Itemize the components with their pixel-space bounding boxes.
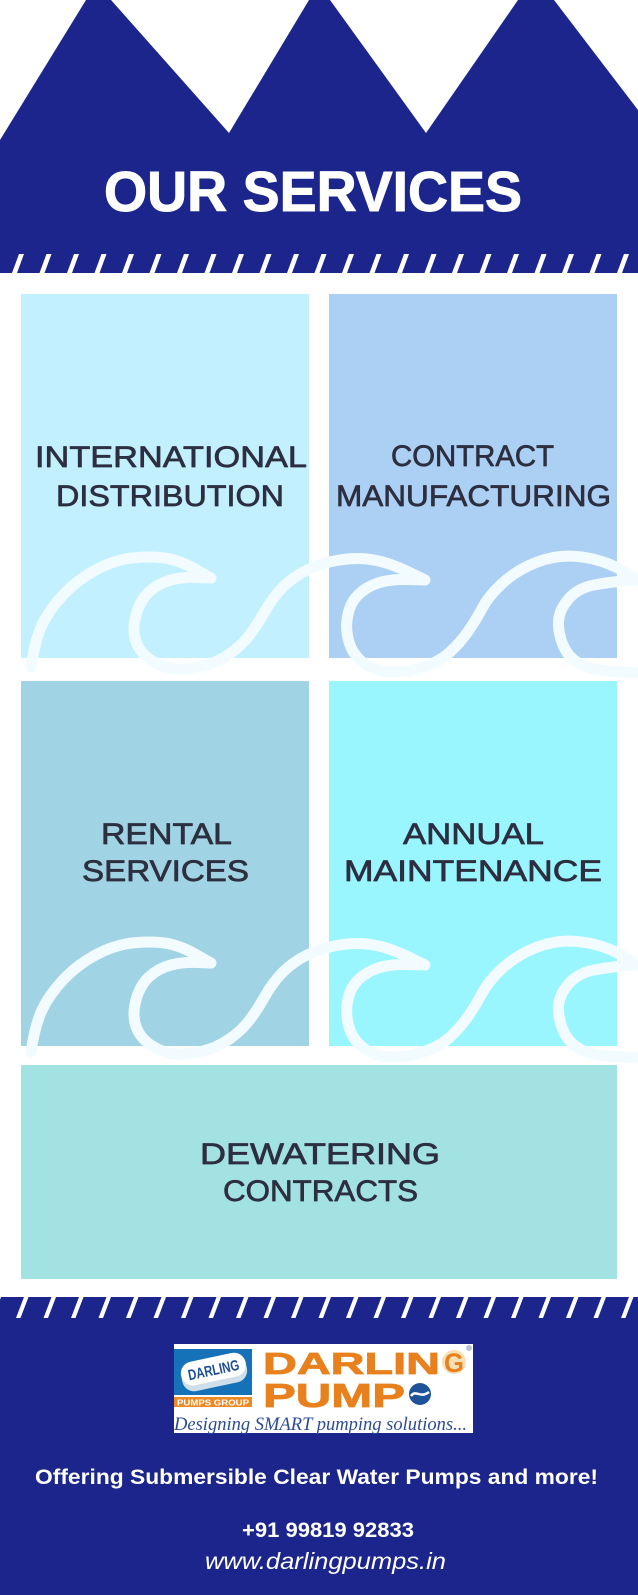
website: www.darlingpumps.in [205, 1548, 446, 1574]
company logo: DARLING [186, 1357, 241, 1384]
company logo: DARLIN [263, 1346, 440, 1381]
label: contract manufacturing [336, 440, 611, 513]
label: dewatering contracts: DEWATERING [200, 1138, 440, 1171]
label: annual maintenance: ANNUAL [403, 818, 544, 851]
panel: annual maintenance [329, 681, 617, 1046]
panel: contract manufacturing [329, 294, 617, 658]
panel: international distribution [21, 294, 309, 658]
label: rental services: RENTAL [101, 818, 232, 851]
header banner [0, 0, 638, 273]
header tick row [12, 254, 629, 273]
company logo: PUMP [263, 1377, 405, 1414]
label: rental services: SERVICES [82, 855, 249, 888]
company logo: PUMPS GROUP [177, 1398, 250, 1408]
panel: dewatering contracts [21, 1065, 617, 1279]
footer tick row [0, 1297, 634, 1318]
label: contract manufacturing: CONTRACT [391, 440, 554, 473]
footer banner [0, 1297, 638, 1595]
tagline: Offering Submersible Clear Water Pumps and more! [35, 1466, 598, 1489]
label: annual maintenance [344, 818, 602, 888]
wave decoration: first row [31, 556, 638, 673]
label: international distribution [35, 441, 307, 513]
wave decoration: second row [31, 941, 638, 1058]
company logo: Designing SMART pumping solutions... [173, 1415, 467, 1435]
company logo [173, 1344, 473, 1435]
label: dewatering contracts [200, 1138, 440, 1208]
label: annual maintenance: MAINTENANCE [344, 855, 602, 888]
panel: rental services [21, 681, 309, 1046]
label: international distribution: INTERNATIONAL [35, 441, 307, 474]
label: dewatering contracts: CONTRACTS [223, 1175, 418, 1208]
title: OUR SERVICES [104, 160, 522, 224]
company logo: G [444, 1348, 464, 1378]
label: contract manufacturing: MANUFACTURING [336, 480, 611, 513]
label: international distribution: DISTRIBUTION [56, 480, 284, 513]
phone number: +91 99819 92833 [242, 1519, 414, 1542]
label: rental services [82, 818, 249, 888]
